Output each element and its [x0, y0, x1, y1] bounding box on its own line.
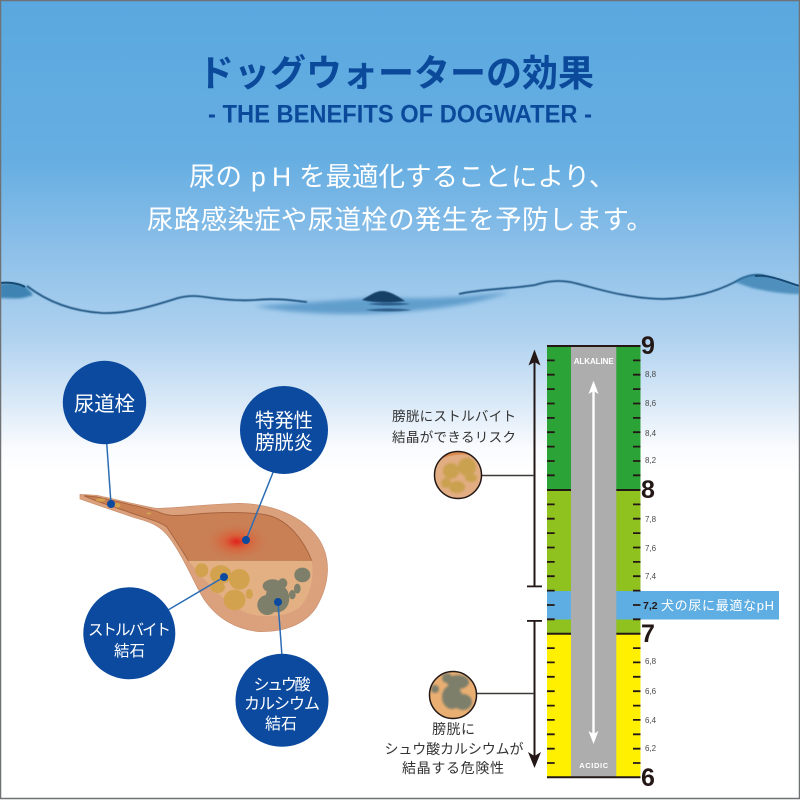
- minor values: 8,2: [645, 456, 657, 465]
- lower range arrow: [527, 620, 542, 768]
- label: calcium oxalate stones: [236, 598, 328, 747]
- label: urethral plug: [63, 361, 146, 508]
- pH scale: [547, 332, 779, 792]
- title: ドッグウォーターの効果: [198, 53, 594, 94]
- calcium oxalate risk note: [384, 721, 524, 776]
- alkaline label: ALKALINE: [574, 357, 614, 366]
- minor values: 7,4: [645, 572, 657, 581]
- label: calcium oxalate stones: カルシウム: [244, 695, 320, 713]
- label: idiopathic cystitis: [240, 386, 328, 544]
- minor values: 8,6: [645, 399, 657, 408]
- band: pH 7 to 8: [547, 490, 640, 634]
- lead text: p: [251, 162, 266, 192]
- label: struvite stones: 結石: [114, 642, 145, 660]
- urethral plug: [96, 498, 151, 514]
- lead text: H: [272, 162, 291, 192]
- lead text: を最適化することにより、: [299, 162, 615, 192]
- lead text: 尿の: [189, 162, 242, 192]
- center column: [571, 347, 616, 777]
- acidic label: ACIDIC: [579, 761, 609, 770]
- label: calcium oxalate stones: シュウ酸: [254, 676, 310, 694]
- calcium oxalate risk note: 結晶する危険性: [402, 760, 504, 776]
- label: calcium oxalate stones: 結石: [265, 715, 297, 733]
- label: struvite stones: [83, 573, 228, 679]
- label: urethral plug: 尿道栓: [74, 393, 135, 416]
- struvite stones: [195, 563, 253, 610]
- icon: calcium oxalate crystal circle: [429, 671, 534, 719]
- minor values: 6,2: [645, 744, 657, 753]
- bladder wall: [80, 494, 328, 632]
- major values: 6: [641, 764, 655, 792]
- minor values: 8,8: [645, 370, 657, 379]
- optimal pH label: 犬の尿に最適なpH: [661, 598, 774, 613]
- band: pH 6 to 7: [547, 634, 640, 777]
- lead text: [147, 162, 653, 235]
- minor values: [645, 370, 657, 753]
- struvite risk note: 結晶ができるリスク: [392, 430, 516, 445]
- minor values: 8,4: [645, 429, 657, 438]
- major values: [641, 332, 655, 792]
- band: pH 8 to 9: [547, 346, 640, 490]
- minor values: 6,8: [645, 657, 657, 666]
- calcium oxalate risk note: シュウ酸カルシウムが: [384, 741, 524, 757]
- minor values: 7,8: [645, 515, 657, 524]
- major values: 9: [641, 332, 655, 360]
- calcium oxalate risk note: 膀胱に: [432, 721, 475, 737]
- white double arrow: [588, 381, 598, 744]
- struvite risk note: [392, 409, 516, 445]
- upper range arrow: [527, 350, 542, 587]
- calcium oxalate stones: [257, 568, 310, 615]
- optimal pH value: 7,2: [643, 600, 658, 612]
- bladder illustration: [80, 494, 328, 632]
- water surface wave: [0, 275, 800, 314]
- minor values: 6,4: [645, 716, 657, 725]
- struvite risk note: 膀胱にストルバイト: [392, 409, 516, 424]
- label: idiopathic cystitis: 特発性: [255, 410, 313, 432]
- major values: 7: [641, 620, 655, 648]
- lead text: 尿路感染症や尿道栓の発生を予防します。: [147, 205, 653, 235]
- label: idiopathic cystitis: 膀胱炎: [255, 432, 313, 454]
- minor values: 7,6: [645, 544, 657, 553]
- icon: struvite crystal circle: [434, 450, 534, 499]
- optimal pH band: [547, 591, 779, 620]
- subtitle: - THE BENEFITS OF DOGWATER -: [208, 100, 592, 128]
- minor values: 6,6: [645, 687, 657, 696]
- major values: 8: [641, 476, 655, 504]
- scale lines and ticks: [547, 346, 640, 777]
- label: struvite stones: ストルバイト: [88, 622, 171, 639]
